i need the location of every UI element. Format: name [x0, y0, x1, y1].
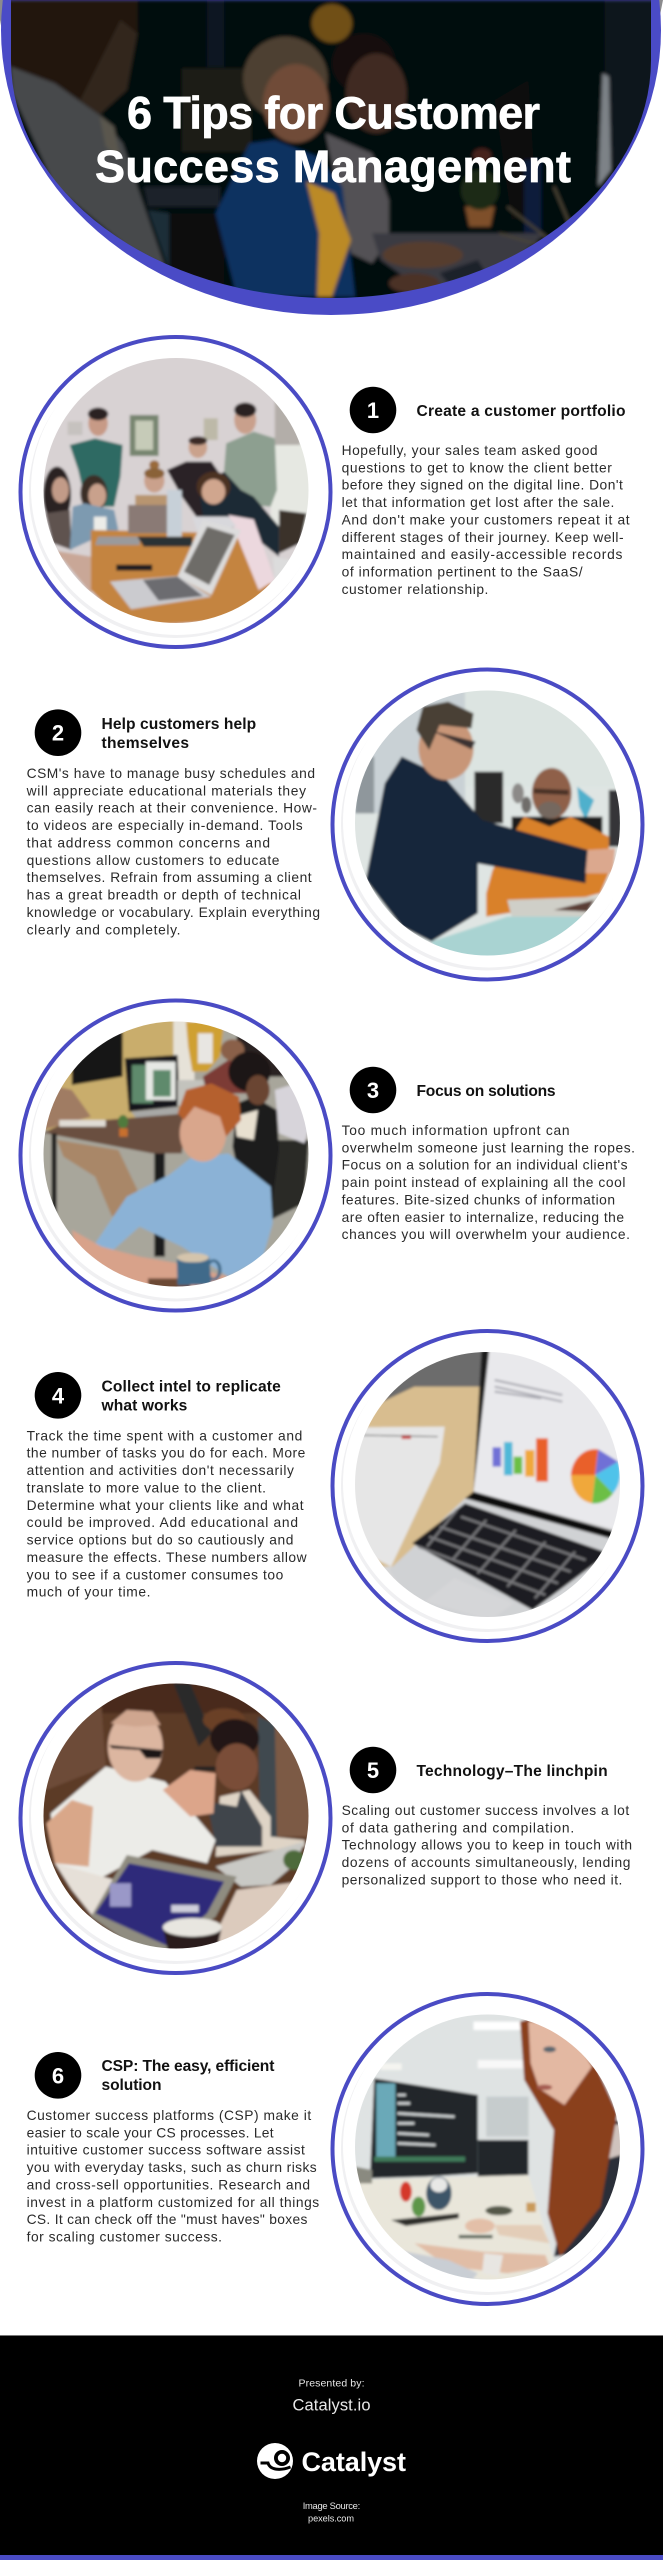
text block 4: Determine what your clients like and what [27, 1498, 304, 1513]
text block 6: for scaling customer success. [27, 2230, 222, 2245]
text block 4 [27, 1428, 307, 1600]
text block 5 [342, 1803, 632, 1888]
number badge 3 [350, 1067, 396, 1113]
heading 2: themselves [102, 735, 189, 752]
text block 2: questions allow customers to educate [27, 853, 280, 868]
panel: footer [0, 2335, 663, 2560]
logo [257, 2443, 406, 2479]
text block 3: Focus on a solution for an individual client's [342, 1158, 628, 1173]
panel: tip 1 [0, 337, 630, 647]
photo: colleagues in a cafe [44, 1684, 308, 1948]
text block 2: will appreciate educational materials they [26, 783, 306, 798]
text block 1 [342, 443, 630, 597]
image ring 1 [20, 337, 330, 647]
heading 3: Focus on solutions [416, 1083, 556, 1100]
text block 2: clearly and completely. [27, 922, 180, 937]
heading 6: solution [102, 2077, 162, 2094]
number badge 2 [35, 709, 81, 756]
heading 4: Collect intel to replicate [102, 1378, 281, 1395]
heading 5: Technology–The linchpin [416, 1763, 608, 1780]
image source: Image Source: [303, 2500, 360, 2511]
text block 5: Technology allows you to keep in touch with [342, 1838, 632, 1853]
text block 3: features. Bite-sized chunks of information [342, 1192, 615, 1208]
number badge 6 [35, 2052, 81, 2099]
heading 1: Create a customer portfolio [416, 403, 626, 420]
text block 6: CS. It can check off the "must haves" boxes [27, 2212, 307, 2227]
photo: laptop with charts [355, 1352, 620, 1617]
text block 5: Scaling out customer success involves a lot [342, 1803, 629, 1818]
number badge 3: 3 [367, 1078, 379, 1103]
text block 1: maintained and easily-accessible records [342, 547, 622, 562]
text block 2: to videos are especially in-demand. Tools [27, 818, 303, 833]
title: 6 Tips for Customer [127, 88, 540, 138]
heading 6: CSP: The easy, efficient [102, 2058, 274, 2075]
text block 1: before they signed on the digital line. Don't [342, 478, 623, 493]
header banner [0, 0, 663, 340]
text block 1: customer relationship. [342, 582, 488, 597]
image source [303, 2500, 360, 2524]
text block 4: much of your time. [27, 1585, 151, 1600]
panel: tip 6 [27, 1994, 643, 2304]
panel: tip 2 [26, 670, 643, 980]
text block 3: chances you will overwhelm your audience. [342, 1227, 630, 1242]
number badge 5: 5 [367, 1758, 379, 1783]
number badge 4 [35, 1372, 81, 1419]
image ring 4 [332, 1331, 642, 1641]
text block 5: of data gathering and compilation. [342, 1820, 574, 1835]
panel: tip 3 [0, 1000, 635, 1310]
heading 2: Help customers help [102, 716, 256, 733]
text block 1: questions to get to know the client better [342, 460, 612, 475]
heading 2 [102, 716, 256, 752]
image ring 3 [20, 1000, 330, 1310]
number badge 4: 4 [52, 1383, 65, 1408]
number badge 1: 1 [367, 398, 379, 423]
text block 3 [342, 1123, 635, 1242]
text block 4: measure the effects. These numbers allow [27, 1550, 307, 1565]
text block 4: translate to more value to the client. [27, 1480, 266, 1495]
image ring 6 [332, 1994, 642, 2304]
text block 2: has a great breadth or depth of technical [27, 888, 301, 903]
text block 4: the number of tasks you do for each. More [27, 1446, 306, 1461]
text block 6: you with everyday tasks, such as churn risks [27, 2160, 317, 2175]
number badge 6: 6 [52, 2063, 64, 2088]
title: Success Management [95, 141, 571, 192]
text block 1: And don't make your customers repeat it at [342, 512, 630, 528]
text block 2: CSM's have to manage busy schedules and [27, 766, 315, 781]
text block 6: Customer success platforms (CSP) make it [27, 2108, 311, 2123]
logo: Catalyst [302, 2447, 406, 2477]
photo: team around laptops [44, 358, 308, 623]
header photo [11, 0, 651, 298]
number badge 5 [350, 1747, 396, 1793]
company name: Catalyst.io [292, 2396, 370, 2414]
text block 6: easier to scale your CS processes. Let [27, 2125, 274, 2140]
heading 4 [100, 1378, 281, 1414]
text block 1: of information pertinent to the SaaS/ [342, 565, 583, 580]
text block 3: pain point instead of explaining all the cool [342, 1175, 625, 1190]
text block 3: are often easier to internalize, reducing the [342, 1210, 624, 1225]
image source: pexels.com [308, 2514, 354, 2524]
text block 2 [26, 766, 320, 937]
image ring 2 [332, 670, 642, 980]
text block 4: attention and activities don't necessarily [27, 1463, 294, 1478]
photo: young man at shared office [44, 1022, 308, 1286]
text block 6 [27, 2108, 319, 2245]
text block 6: and cross-sell opportunities. Research and [27, 2178, 310, 2192]
text block 3: Too much information upfront can [342, 1123, 570, 1138]
text block 5: personalized support to those who need it. [342, 1872, 622, 1888]
text block 4: you to see if a customer consumes too [27, 1567, 284, 1582]
photo: two men at desk [355, 690, 620, 956]
text block 4: could be improved. Add educational and [27, 1515, 298, 1530]
text block 2: themselves. Refrain from assuming a client [27, 870, 312, 885]
text block 1: Hopefully, your sales team asked good [342, 443, 598, 458]
title [95, 88, 571, 192]
image ring 5 [20, 1663, 330, 1973]
text block 4: service options but do so cautiously and [27, 1532, 293, 1548]
text block 5: dozens of accounts simultaneously, lending [342, 1855, 630, 1870]
text block 2: can easily reach at their convenience. How- [27, 801, 317, 816]
text block 3: overwhelm someone just learning the ropes. [342, 1140, 635, 1155]
photo: woman at code monitor [355, 2014, 620, 2280]
text block 4: Track the time spent with a customer and [27, 1428, 302, 1443]
text block 6: invest in a platform customized for all things [27, 2195, 319, 2210]
number badge 2: 2 [52, 721, 64, 746]
heading 6 [102, 2058, 274, 2094]
text block 2: that address common concerns and [27, 836, 270, 850]
presented by: Presented by: [298, 2378, 364, 2390]
panel: tip 4 [27, 1331, 643, 1641]
number badge 1 [350, 387, 396, 433]
text block 1: let that information get lost after the sale. [342, 495, 614, 510]
panel: tip 5 [0, 1663, 632, 1973]
text block 6: intuitive customer success software assist [27, 2143, 305, 2158]
text block 2: knowledge or vocabulary. Explain everything [27, 905, 320, 920]
text block 1: different stages of their journey. Keep well- [342, 530, 624, 545]
accent bar [0, 2555, 663, 2560]
heading 4: what works [100, 1397, 188, 1414]
